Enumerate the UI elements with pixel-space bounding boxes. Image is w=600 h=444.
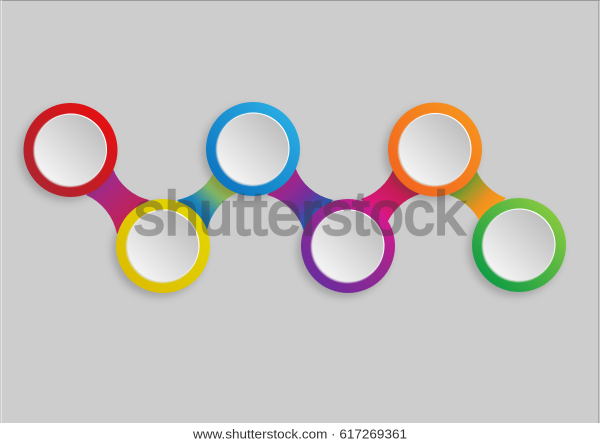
node: red circle [24, 103, 118, 197]
connector: red to yellow [86, 169, 149, 234]
connector: yellow to blue [177, 174, 239, 230]
footer credit: www.shutterstock.com · 617269361 [192, 428, 407, 442]
node: blue circle [206, 102, 300, 196]
watermark: shutterstock [134, 180, 466, 248]
node: purple circle [301, 199, 395, 293]
node: green circle [472, 198, 566, 292]
connector: orange to green [449, 170, 506, 222]
connector: purple to orange [361, 170, 420, 228]
shadows of lower circles [112, 202, 562, 297]
shadows of upper circles [20, 106, 478, 201]
node: yellow circle [116, 199, 210, 293]
node: orange circle [388, 102, 482, 196]
connector: blue to purple [267, 167, 333, 232]
